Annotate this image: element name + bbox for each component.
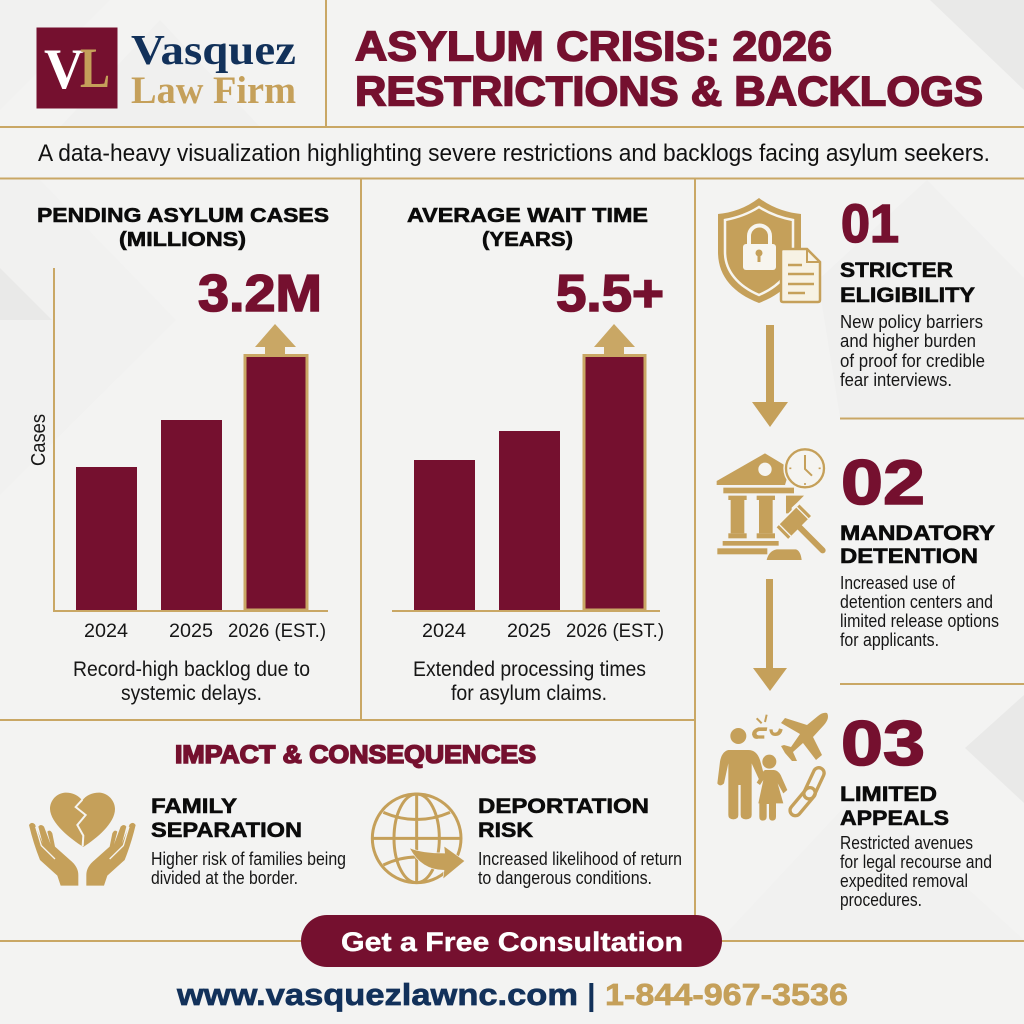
- item heading: DEPORTATION: [478, 794, 649, 818]
- axis year labels: 2024: [422, 620, 466, 642]
- step description: New policy barriers: [840, 311, 983, 332]
- title: RESTRICTIONS & BACKLOGS: [355, 68, 983, 114]
- item heading: FAMILY: [151, 794, 237, 818]
- chart heading: average wait time: [407, 204, 648, 251]
- chart heading: average wait time: AVERAGE WAIT TIME: [407, 204, 648, 227]
- chart axes: [54, 268, 328, 611]
- callout: 5.5+: 5.5+: [556, 265, 664, 323]
- item heading: [478, 794, 649, 842]
- logo mark: VL monogram: L: [80, 37, 110, 100]
- panel: impact and consequences: [29, 741, 682, 888]
- panel: average wait time chart: [392, 204, 664, 705]
- call to action button: Get a Free Consultation: [341, 927, 683, 957]
- item heading: RISK: [478, 818, 533, 842]
- chart caption: systemic delays.: [121, 681, 262, 705]
- step heading: STRICTER: [840, 259, 953, 282]
- chart heading: pending asylum cases: [37, 204, 329, 251]
- axis year labels: 2026 (EST.): [566, 620, 664, 642]
- logo mark: VL monogram: [36, 28, 118, 108]
- chart heading: average wait time: (YEARS): [482, 228, 573, 251]
- logo wordmark: [131, 28, 296, 112]
- item description: Increased likelihood of return: [478, 848, 682, 869]
- step description: for legal recourse and: [840, 851, 992, 872]
- axis year labels: [84, 620, 326, 642]
- chart heading: pending asylum cases: (MILLIONS): [119, 228, 246, 251]
- step heading: [840, 259, 975, 307]
- item heading: SEPARATION: [151, 818, 302, 842]
- step description: and higher burden: [840, 330, 976, 351]
- step description: limited release options: [840, 610, 999, 631]
- chart caption: [413, 657, 646, 705]
- footer contact line: [176, 977, 848, 1012]
- callout: 3.2M: 3.2M: [198, 265, 322, 323]
- step heading: MANDATORY: [840, 522, 995, 545]
- item: family separation: [29, 793, 346, 888]
- axis year labels: 2025: [169, 620, 213, 642]
- chart caption: [73, 657, 310, 705]
- bar chart: wait time by year: [414, 356, 645, 610]
- step heading: [840, 522, 995, 568]
- step heading: ELIGIBILITY: [840, 284, 975, 307]
- axis year labels: 2025: [507, 620, 551, 642]
- item description: [478, 848, 682, 888]
- icon: courthouse, clock and gavel: [717, 449, 824, 560]
- step description: expedited removal: [840, 870, 968, 891]
- chart caption: Record-high backlog due to: [73, 657, 310, 681]
- footer contact line: 1-844-967-3536: [605, 977, 848, 1012]
- step number 01: 01: [841, 194, 899, 254]
- icon: shield with lock and document: [718, 198, 820, 303]
- step number 02: 02: [841, 448, 925, 518]
- arrow: rising wait time: [594, 324, 635, 354]
- step heading: DETENTION: [840, 545, 978, 568]
- chart caption: for asylum claims.: [451, 681, 607, 705]
- chart axis: [392, 610, 660, 612]
- panel: step 02 mandatory detention: [717, 448, 999, 650]
- step description: for applicants.: [840, 629, 939, 650]
- step heading: APPEALS: [840, 807, 949, 830]
- section heading: IMPACT & CONSEQUENCES: [175, 741, 536, 769]
- item description: [151, 848, 346, 888]
- footer contact line: www.vasquezlawnc.com: [176, 977, 578, 1012]
- panel: pending asylum cases chart: [28, 204, 329, 705]
- y axis label: Cases: [28, 414, 50, 466]
- bar chart: cases by year: [76, 356, 307, 610]
- step description: of proof for credible: [840, 350, 985, 371]
- step description: [840, 572, 999, 650]
- step description: [840, 832, 992, 910]
- logo mark: VL monogram: V: [44, 38, 84, 101]
- arrow: step 01 to step 02: [752, 325, 788, 427]
- step heading: LIMITED: [840, 783, 937, 806]
- axis year labels: [422, 620, 664, 642]
- step heading: [840, 783, 949, 830]
- item description: divided at the border.: [151, 867, 298, 888]
- step description: procedures.: [840, 889, 922, 910]
- logo wordmark: Law Firm: [131, 69, 296, 112]
- icon: globe with arrow: [372, 794, 464, 883]
- item: deportation risk: [372, 794, 682, 888]
- step description: detention centers and: [840, 591, 993, 612]
- panel: step 01 stricter eligibility: [718, 194, 985, 390]
- chart heading: pending asylum cases: PENDING ASYLUM CASES: [37, 204, 329, 227]
- item description: Higher risk of families being: [151, 848, 346, 869]
- step description: fear interviews.: [840, 369, 952, 390]
- logo wordmark: Vasquez: [131, 28, 296, 74]
- chart caption: Extended processing times: [413, 657, 646, 681]
- axis year labels: 2026 (EST.): [228, 620, 326, 642]
- step number 03: 03: [841, 709, 925, 779]
- step description: Restricted avenues: [840, 832, 973, 853]
- title: ASYLUM CRISIS: 2026: [355, 22, 832, 70]
- step description: Increased use of: [840, 572, 956, 593]
- subtitle: A data-heavy visualization highlighting severe restrictions and backlogs facing asylum seekers.: [38, 140, 990, 167]
- logo: Vasquez Law Firm: [36, 28, 296, 112]
- icon: family, plane and broken chain: [717, 713, 828, 821]
- title: [355, 22, 983, 114]
- item heading: [151, 794, 302, 842]
- item description: to dangerous conditions.: [478, 867, 652, 888]
- call to action button: [301, 915, 722, 967]
- icon: broken heart in hands: [29, 793, 136, 886]
- panel: step 03 limited appeals: [717, 709, 992, 910]
- arrow: step 02 to step 03: [753, 579, 787, 691]
- footer contact line: |: [587, 977, 596, 1012]
- axis year labels: 2024: [84, 620, 128, 642]
- step description: [840, 311, 985, 390]
- arrow: rising cases: [255, 324, 296, 354]
